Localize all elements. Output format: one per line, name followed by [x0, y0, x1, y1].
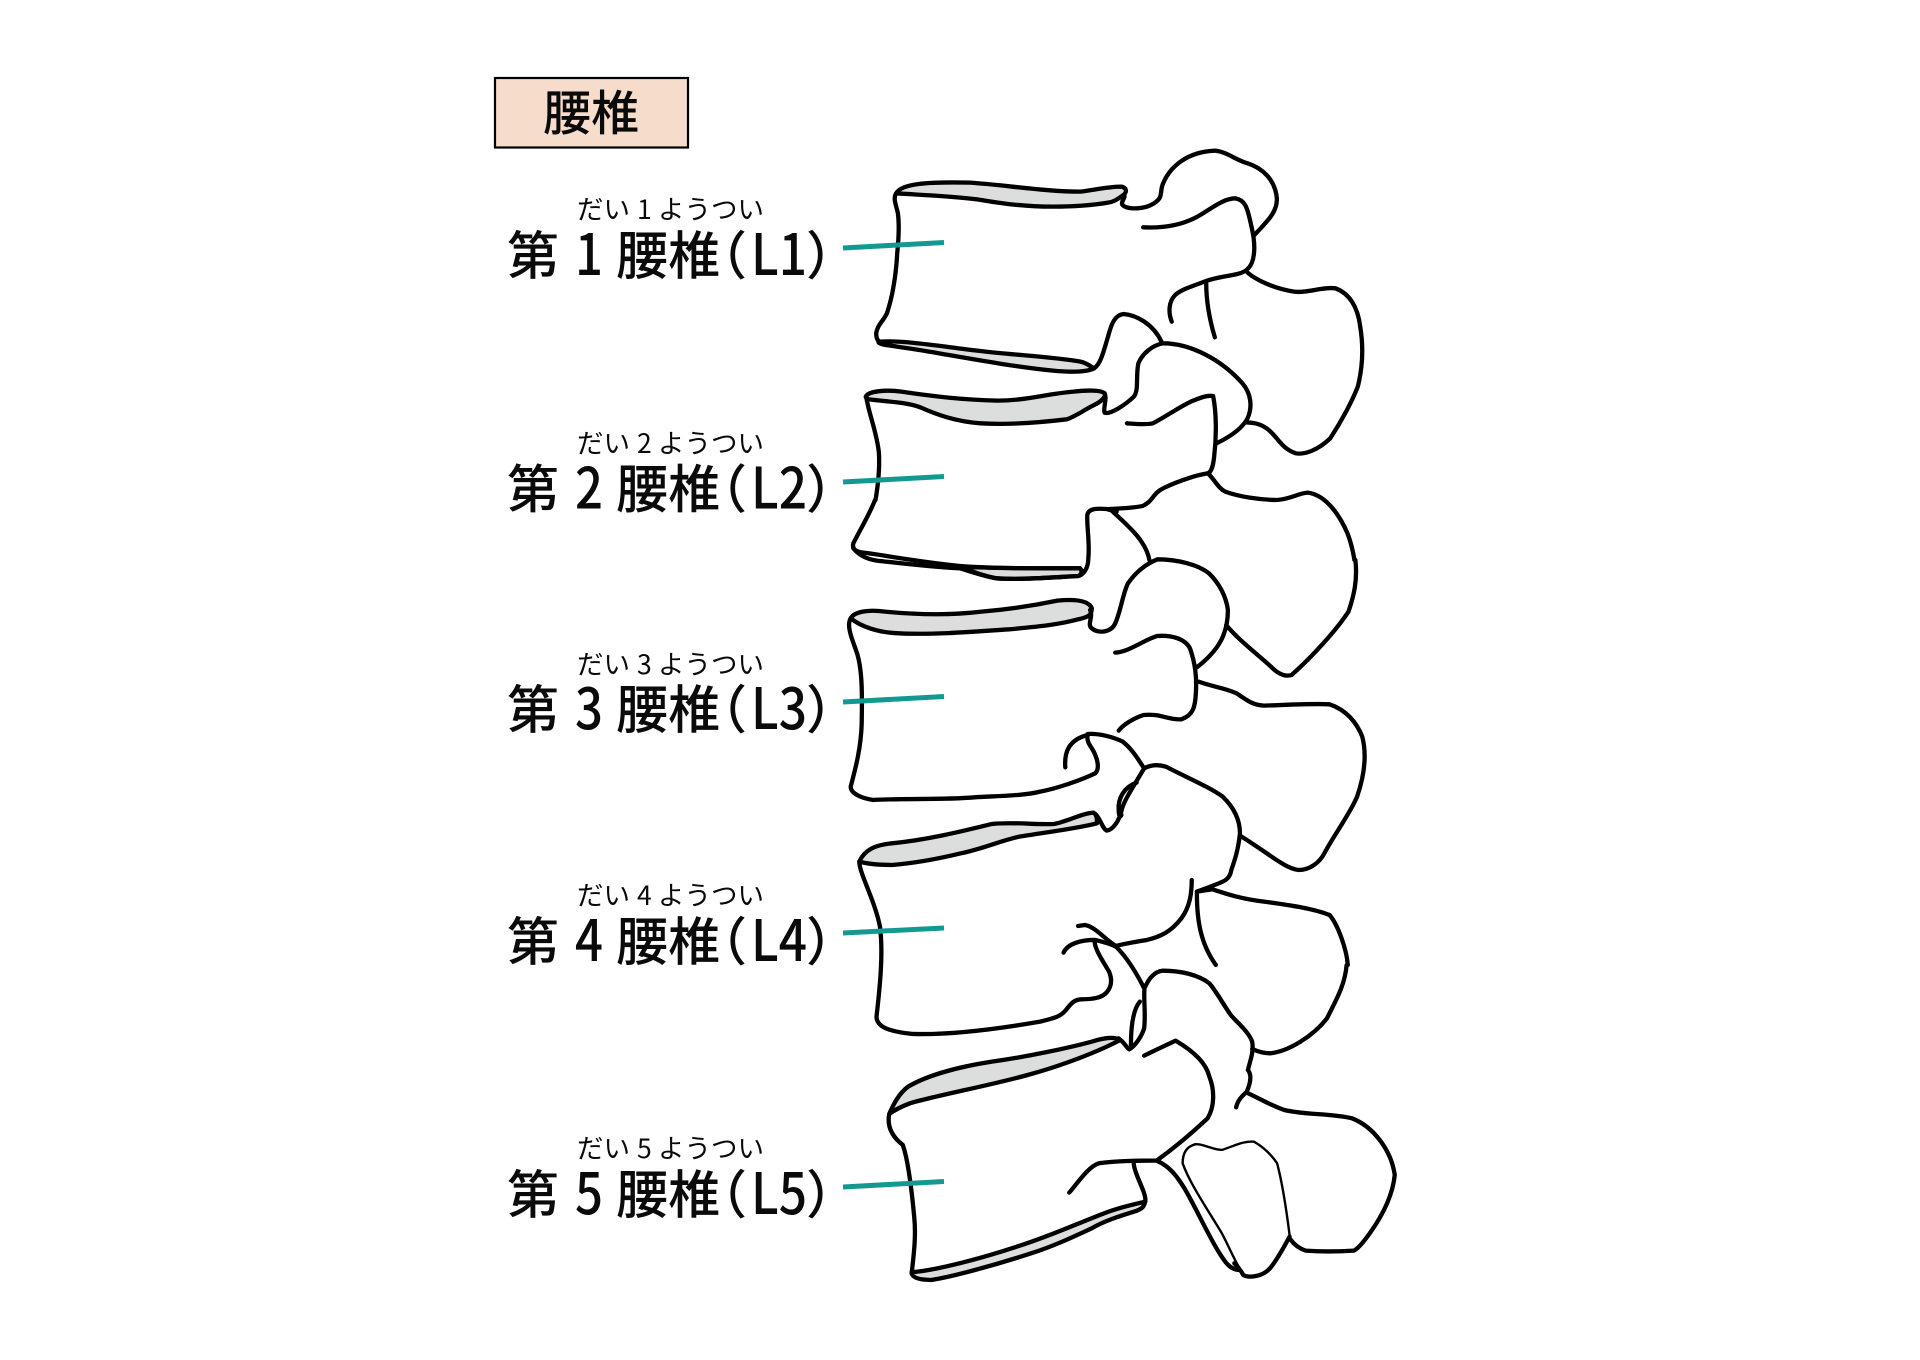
heading: lumbar vertebrae [495, 74, 688, 148]
label: L5: 5 [575, 1149, 603, 1231]
label: L5 [507, 1127, 858, 1231]
label: L3: 腰椎 [616, 668, 720, 744]
label: L5: ） [806, 1154, 858, 1228]
label: L2: だい [577, 422, 630, 461]
leader lines [843, 242, 944, 1187]
label: L2: ようつい [658, 422, 764, 461]
label: L5: 第 [507, 1154, 559, 1228]
label: L1: 1 [575, 210, 603, 292]
label: L1: ようつい [658, 188, 764, 227]
label: L4: ） [806, 900, 858, 976]
label: L2: 第 [507, 448, 559, 523]
label: L1: だい [577, 188, 630, 227]
vertebra L4 [859, 765, 1348, 1053]
label: L5: だい [577, 1127, 630, 1166]
label: L5: L5 [751, 1149, 807, 1231]
label: L3: ） [806, 668, 858, 744]
label: L1: 第 [507, 214, 559, 290]
label: L4: だい [577, 874, 630, 913]
label: L4 [507, 874, 858, 978]
label: L2: 2 [575, 444, 603, 526]
vertebra L5 [889, 971, 1395, 1280]
label: L1: 腰椎 [616, 214, 720, 290]
label: L2: ） [806, 448, 858, 523]
label: L1: ） [806, 214, 858, 290]
label: L4: （ [695, 900, 747, 976]
label: L2: 腰椎 [616, 448, 720, 523]
label: L1: L1 [751, 210, 807, 292]
label: L2: （ [695, 448, 747, 523]
label: L3: だい [577, 643, 630, 682]
label: L4: 第 [507, 900, 559, 976]
label: L3: L3 [751, 664, 807, 746]
label: L3: （ [695, 668, 747, 744]
label: L4: L4 [751, 896, 807, 978]
vertebra L2 [853, 343, 1356, 676]
vertebra L1 [876, 151, 1362, 454]
label: L1 [507, 188, 858, 292]
label: L3: 3 [637, 643, 652, 682]
heading: lumbar vertebrae: 腰椎 [543, 74, 639, 144]
label: L1: 1 [637, 188, 652, 227]
label: L5: 腰椎 [616, 1154, 720, 1228]
label: L2 [507, 422, 858, 526]
label: L2: L2 [751, 444, 807, 526]
label: L5: ようつい [658, 1127, 764, 1166]
label: L1: （ [695, 214, 747, 290]
vertebra L3 [849, 559, 1365, 870]
label: L5: （ [695, 1154, 747, 1228]
label: L3 [507, 643, 858, 746]
label: L4: 4 [575, 896, 603, 978]
label: L5: 5 [637, 1127, 652, 1166]
label: L4: ようつい [658, 874, 764, 913]
label: L4: 腰椎 [616, 900, 720, 976]
label: L2: 2 [637, 422, 652, 461]
label: L3: ようつい [658, 643, 764, 682]
label: L4: 4 [637, 874, 652, 913]
label: L3: 第 [507, 668, 559, 744]
label: L3: 3 [575, 664, 603, 746]
